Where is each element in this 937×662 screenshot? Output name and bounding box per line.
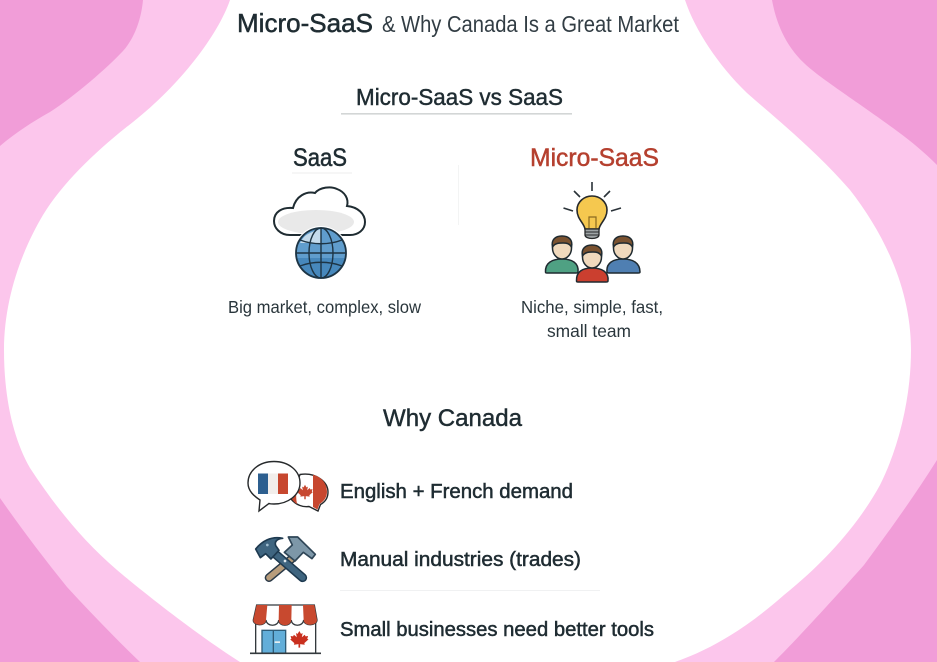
SaaS description: Big market, complex, slow (228, 297, 421, 317)
Micro-SaaS heading: Micro-SaaS (530, 144, 659, 172)
background: dark pink top-left (0, 0, 143, 146)
heading: Micro-SaaS vs SaaS: Micro-SaaS vs SaaS (356, 84, 563, 110)
icon: storefront with maple leaf (250, 605, 321, 653)
Micro-SaaS description: Niche, simple, fast, (521, 297, 663, 317)
Micro-SaaS description: small team (547, 321, 631, 341)
icon: cloud and globe (274, 187, 365, 280)
icon: crossed hammer and hatchet (256, 537, 315, 578)
icon: team of three people (545, 236, 640, 282)
heading: Why Canada: Why Canada (383, 405, 523, 432)
label: Small businesses need better tools (340, 619, 654, 641)
row: Manual industries (trades) (256, 537, 581, 578)
title: & Why Canada Is a Great Market (382, 11, 680, 37)
icon: speech bubbles with flags (248, 462, 328, 511)
row: Small businesses need better tools (250, 605, 654, 653)
title (237, 8, 680, 38)
row: English + French demand (248, 462, 573, 511)
label: English + French demand (340, 481, 573, 503)
background: dark pink bottom-left (0, 498, 140, 662)
icon: light bulb (564, 182, 621, 238)
background: dark pink bottom-right (774, 460, 937, 662)
panel: SaaS (228, 144, 421, 317)
panel: Micro-SaaS (521, 144, 663, 341)
title: Micro-SaaS (237, 8, 373, 38)
SaaS heading: SaaS (293, 144, 347, 172)
Micro-SaaS description (521, 297, 663, 341)
background: dark pink top-right (772, 0, 937, 165)
label: Manual industries (trades) (340, 549, 581, 571)
